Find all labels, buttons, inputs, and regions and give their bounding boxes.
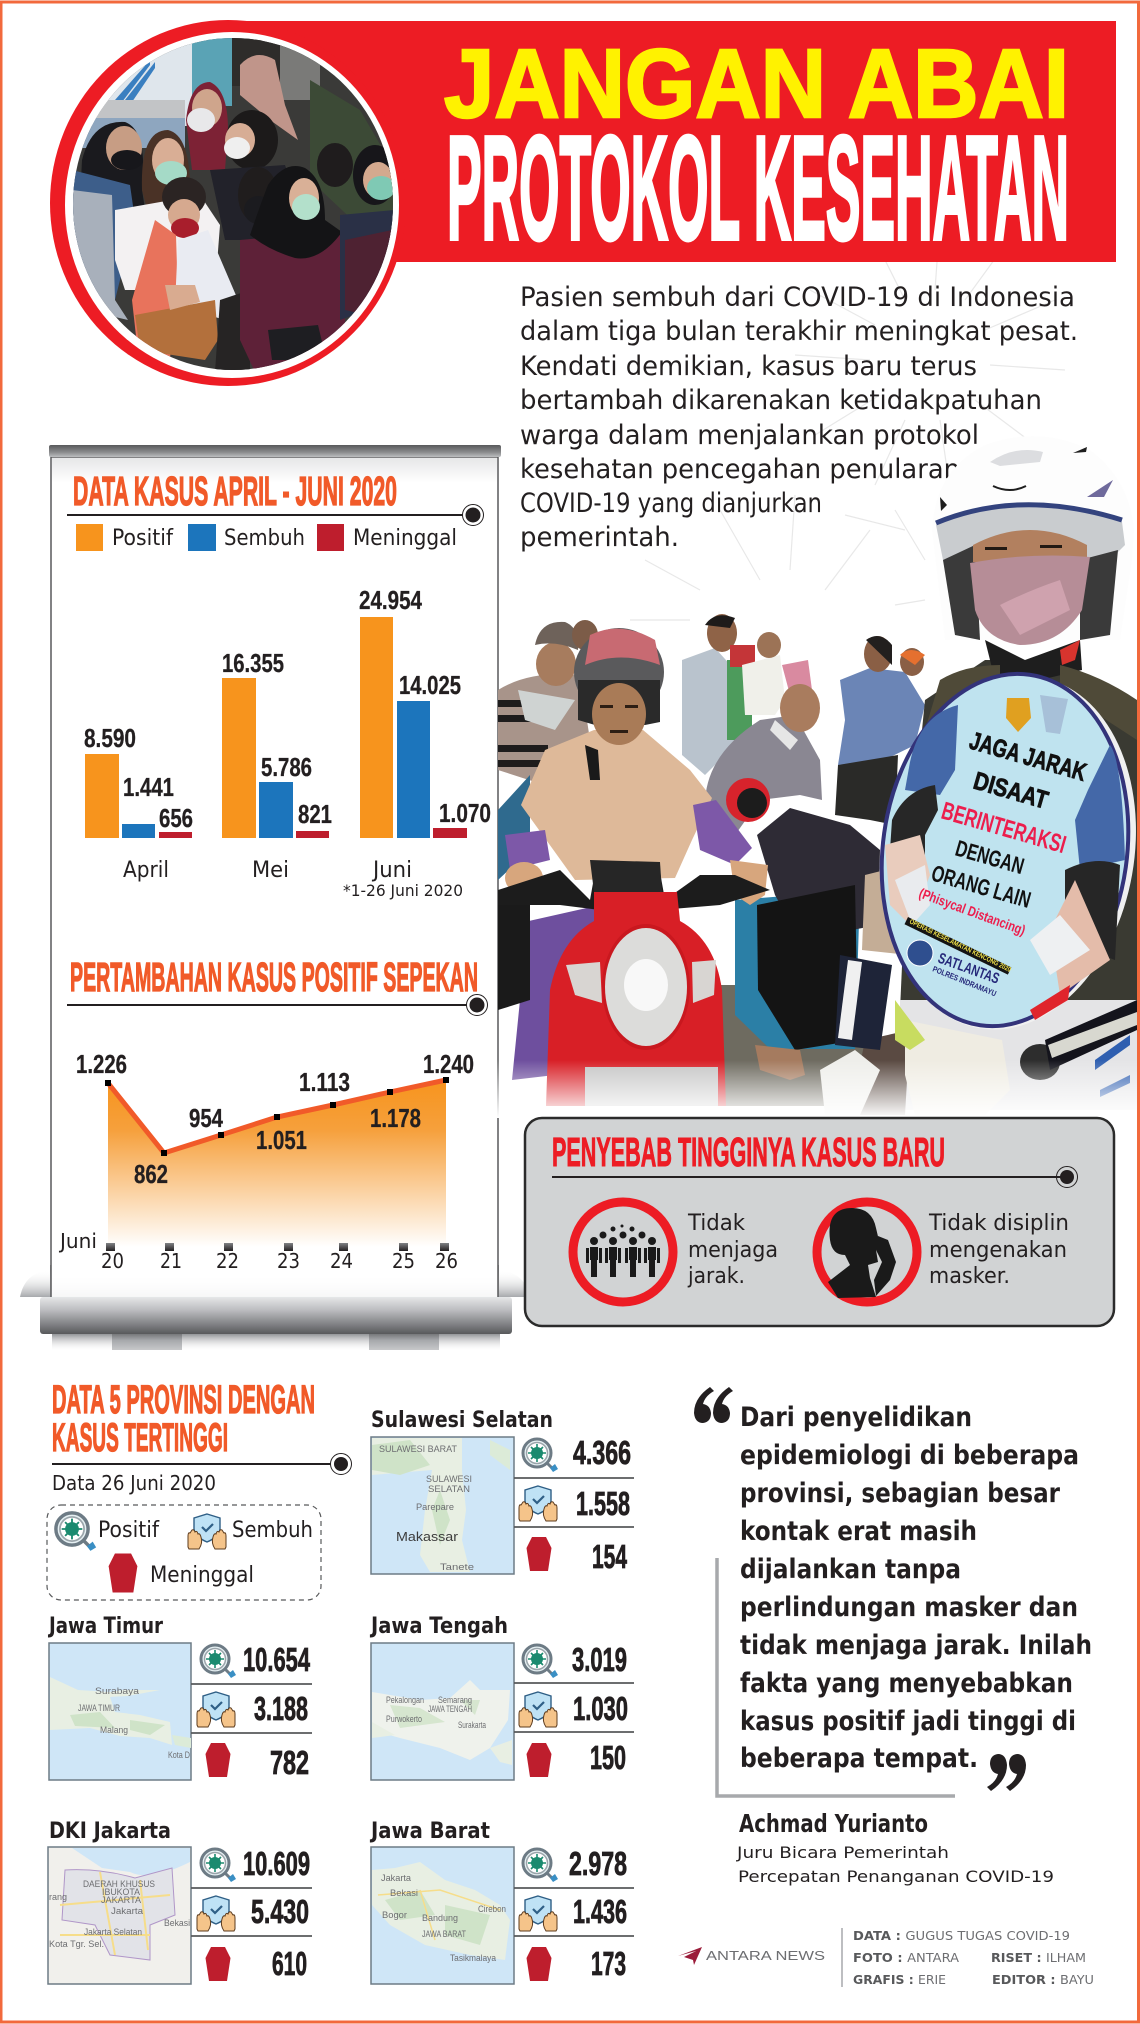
province: Jawa Barat: 173 <box>591 1945 626 1982</box>
quote text: perlindungan masker dan <box>740 1592 1078 1623</box>
bar chart: Mei <box>252 858 289 883</box>
closing quote mark <box>987 1754 1026 1791</box>
title banner <box>228 21 1116 271</box>
sign text: JAGA JARAK <box>966 727 1089 787</box>
area line chart: 1.051 <box>256 1125 307 1155</box>
cause text two <box>928 1211 1069 1289</box>
officer helmet <box>947 436 1035 490</box>
intro paragraph <box>520 282 1078 553</box>
map: Jakarta Selatan <box>84 1927 142 1937</box>
quote text: provinsi, sebagian besar <box>740 1478 1061 1509</box>
hanger tab right <box>369 1334 439 1350</box>
heading: data kasus <box>67 468 484 526</box>
area line chart: 23 <box>277 1249 300 1273</box>
province: Jawa Tengah <box>369 1614 634 1780</box>
speaker name: Achmad Yurianto <box>739 1809 928 1838</box>
heading: data kasus: DATA KASUS APRIL - JUNI 2020 <box>73 468 397 514</box>
map: Kota D <box>168 1750 190 1760</box>
province: Jawa Timur <box>47 1614 312 1781</box>
icon: crowd not distancing <box>573 1202 673 1302</box>
banner background <box>228 21 1116 262</box>
map: Makassar <box>396 1529 459 1544</box>
area line chart: 862 <box>134 1159 168 1189</box>
bar chart: 16.355 <box>222 648 284 678</box>
map: Bekasi <box>390 1888 418 1898</box>
map: Tanete <box>440 1562 474 1572</box>
map: Malang <box>100 1725 128 1735</box>
map: IBUKOTA <box>102 1887 140 1897</box>
province: Jawa Timur: 10.654 <box>243 1641 310 1678</box>
officer mask <box>970 555 1090 645</box>
intro paragraph: pemerintah. <box>520 522 679 553</box>
headline line one: JANGAN ABAI <box>444 29 1069 138</box>
intro paragraph: warga dalam menjalankan protokol <box>520 420 979 451</box>
officer sleeve <box>835 955 892 1050</box>
province: Jawa Tengah: 3.019 <box>572 1641 627 1678</box>
map: DAERAH KHUSUS <box>83 1879 155 1889</box>
map: Bekasi <box>164 1918 190 1928</box>
hi-vis vest <box>895 1000 925 1050</box>
bar chart legend <box>76 524 457 551</box>
province: Jawa Timur: 3.188 <box>254 1690 308 1727</box>
province: Jawa Barat: 1.436 <box>573 1893 627 1930</box>
sign text: DISAAT <box>970 767 1051 815</box>
map: JAWA TIMUR <box>78 1703 120 1713</box>
board rim <box>857 656 1140 1050</box>
province: Sulawesi Selatan: 1.558 <box>576 1485 630 1522</box>
scroll panel: case data <box>20 445 530 1350</box>
province: DKI Jakarta: 10.609 <box>243 1845 310 1882</box>
police badges <box>1006 698 1031 732</box>
legend: province icons: Sembuh <box>232 1518 313 1543</box>
map: Surabaya <box>95 1686 139 1696</box>
panel: causes of new cases <box>525 1118 1114 1326</box>
area line chart <box>58 1049 474 1273</box>
area line chart: 1.240 <box>423 1049 474 1079</box>
officer body <box>900 660 1137 1010</box>
bar chart: 1.441 <box>123 772 174 802</box>
map: JAKARTA <box>101 1895 141 1905</box>
map: Bandung <box>422 1913 458 1923</box>
logo: Antara News: ANTARA NEWS <box>706 1948 825 1963</box>
area line chart: 22 <box>216 1249 239 1273</box>
text: PERTAMBAHAN KASUS POSITIF SEPEKAN <box>70 954 478 1000</box>
sign board held by officer <box>857 656 1140 1050</box>
bar chart: 14.025 <box>399 670 461 700</box>
bar chart: 1.070 <box>439 798 491 828</box>
intro paragraph: Kendati demikian, kasus baru terus <box>520 351 977 382</box>
province: Jawa Tengah: Jawa Tengah <box>369 1614 508 1639</box>
map: Jakarta <box>381 1873 411 1883</box>
province: DKI Jakarta: 610 <box>272 1945 307 1982</box>
intro paragraph: Pasien sembuh dari COVID-19 di Indonesia <box>520 282 1075 313</box>
hunched dark man <box>757 808 880 940</box>
map: Tasikmalaya <box>450 1953 496 1963</box>
map <box>49 1643 191 1780</box>
quote block: Percepatan Penanganan COVID-19 <box>738 1867 1054 1886</box>
blue silhouettes <box>905 705 958 795</box>
province: Jawa Timur: 782 <box>270 1744 309 1781</box>
bar chart legend: Positif <box>112 526 174 551</box>
handlebars <box>498 870 770 910</box>
legend: province icons <box>47 1505 321 1600</box>
sign text: BERINTERAKSI <box>938 797 1069 859</box>
standing white shirt man <box>682 648 740 775</box>
center woman <box>142 130 190 204</box>
map <box>371 1643 514 1780</box>
bottom roller <box>40 1297 512 1334</box>
province: Jawa Tengah: 150 <box>590 1739 626 1776</box>
credits: DATA : GUGUS TUGAS COVID-19 <box>853 1929 1070 1943</box>
bar chart legend: Meninggal <box>353 526 457 551</box>
maroon hijab woman <box>186 82 228 170</box>
area line chart: 1.178 <box>370 1103 421 1133</box>
quote block <box>694 1387 1092 1886</box>
map: Surakarta <box>458 1720 486 1730</box>
sign text: OPERASI KESELAMATAN KENCONG 2020 <box>908 919 1012 974</box>
top rail <box>49 445 501 457</box>
circular crowd photo <box>50 20 406 386</box>
quote bracket <box>717 1558 955 1796</box>
area line chart: 1.113 <box>299 1067 350 1097</box>
sign text: (Phisycal Distancing) <box>917 885 1028 938</box>
right woman <box>353 145 397 205</box>
map: JAWA TENGAH <box>428 1704 472 1714</box>
map <box>48 1847 191 1984</box>
shadow above roller <box>20 1270 530 1297</box>
decorative virus outlines <box>630 220 1065 620</box>
area line chart: 25 <box>392 1249 415 1273</box>
map: rang <box>49 1892 67 1902</box>
white mask woman <box>226 110 278 170</box>
heading: five provinces: KASUS TERTINGGI <box>52 1416 228 1460</box>
map: JAWA BARAT <box>422 1929 466 1939</box>
background people <box>498 674 590 790</box>
intro paragraph: COVID-19 yang dianjurkan <box>520 488 822 519</box>
opening quote mark <box>694 1387 733 1423</box>
heading: five provinces: Data 26 Juni 2020 <box>52 1471 216 1495</box>
speaker role: Juru Bicara Pemerintah <box>736 1843 949 1862</box>
map <box>371 1847 514 1984</box>
map: Bogor <box>382 1910 407 1920</box>
gray shirt man <box>705 715 822 835</box>
quote text: tidak menjaga jarak. Inilah <box>740 1630 1092 1661</box>
quote text: kasus positif jadi tinggi di <box>740 1706 1076 1737</box>
quote text: dijalankan tanpa <box>740 1554 961 1585</box>
right masked face <box>1065 861 1120 960</box>
shadow below roller <box>52 1334 500 1350</box>
credits <box>853 1929 1094 1987</box>
bar chart: *1-26 Juni 2020 <box>343 881 463 900</box>
bar chart: Juni <box>371 858 412 883</box>
area line chart: 21 <box>160 1249 182 1273</box>
map: Kota Tgr. Sel. <box>49 1939 104 1949</box>
province: DKI Jakarta: 5.430 <box>251 1893 309 1930</box>
quote text: kontak erat masih <box>740 1516 977 1547</box>
area line chart: 24 <box>330 1249 353 1273</box>
sign text <box>904 727 1089 998</box>
map <box>371 1437 514 1574</box>
bar chart: 5.786 <box>261 752 312 782</box>
black hijab woman with maroon sweater <box>240 230 345 372</box>
area line chart: 1.226 <box>76 1049 127 1079</box>
credits: FOTO : ANTARA <box>853 1951 960 1965</box>
motorcyclist woman <box>512 908 594 1080</box>
sign text: DENGAN <box>953 835 1027 879</box>
bar chart: 656 <box>159 803 193 833</box>
map: Semarang <box>438 1695 472 1705</box>
cause text one: jarak. <box>687 1264 745 1289</box>
intro paragraph: kesehatan pencegahan penularan <box>520 454 960 485</box>
province: Jawa Barat: 2.978 <box>569 1845 627 1882</box>
map: Pekalongan <box>386 1695 424 1705</box>
cause text one: Tidak <box>687 1211 745 1236</box>
bar chart: 821 <box>298 799 332 829</box>
bar chart legend: Sembuh <box>224 526 305 551</box>
quote text: fakta yang menyebabkan <box>740 1668 1073 1699</box>
intro paragraph: bertambah dikarenakan ketidakpatuhan <box>520 385 1042 416</box>
shoulder <box>928 665 1000 722</box>
bar chart: April <box>123 858 169 883</box>
province: Sulawesi Selatan: Sulawesi Selatan <box>371 1408 553 1433</box>
sign text: SATLANTAS <box>936 950 1002 988</box>
hanger tab left <box>112 1334 182 1350</box>
intro paragraph: dalam tiga bulan terakhir meningkat pesat. <box>520 316 1078 347</box>
map: SELATAN <box>428 1484 470 1494</box>
area line chart: 20 <box>101 1249 124 1273</box>
bar chart: 8.590 <box>84 723 136 753</box>
map: Jakarta <box>111 1906 143 1916</box>
province: Sulawesi Selatan <box>371 1408 634 1575</box>
bar chart <box>84 585 491 900</box>
logo: Antara News <box>678 1947 825 1965</box>
province: Sulawesi Selatan: 154 <box>592 1538 627 1575</box>
area line chart: 26 <box>435 1249 458 1273</box>
cause text two: Tidak disiplin <box>928 1211 1069 1236</box>
left masked face <box>890 785 938 870</box>
cause text one <box>687 1211 778 1289</box>
red scooter <box>546 892 726 1106</box>
province: Jawa Timur: Jawa Timur <box>47 1614 163 1639</box>
sign text: ORANG LAIN <box>929 860 1034 913</box>
red mask woman <box>162 177 206 212</box>
blue cart and road <box>718 985 870 1106</box>
cause text two: mengenakan <box>929 1238 1067 1263</box>
photo: motorcyclist and officer crowd <box>498 436 1137 1115</box>
left woman <box>82 122 144 207</box>
credits: RISET : ILHAM <box>991 1951 1086 1965</box>
map: Cirebon <box>478 1904 506 1914</box>
icon: touching nose without mask <box>817 1202 917 1302</box>
beige hijab woman <box>240 55 298 140</box>
cause text one: menjaga <box>688 1238 778 1263</box>
quote text: epidemiologi di beberapa <box>740 1440 1079 1471</box>
province: Sulawesi Selatan: 4.366 <box>573 1434 631 1471</box>
cause text two: masker. <box>929 1264 1010 1289</box>
heading: five provinces: DATA 5 PROVINSI DENGAN <box>52 1378 315 1422</box>
panel sheet <box>51 457 498 1297</box>
bar chart: 24.954 <box>359 585 422 615</box>
sign text: POLRES INDRAMAYU <box>931 965 998 998</box>
map: SULAWESI BARAT <box>379 1444 457 1454</box>
credits: EDITOR : BAYU <box>992 1973 1094 1987</box>
heading: pertambahan kasus <box>67 954 488 1016</box>
map: SULAWESI <box>426 1474 472 1484</box>
map: Parepare <box>416 1502 454 1512</box>
credits: GRAFIS : ERIE <box>853 1973 946 1987</box>
province: Jawa Tengah: 1.030 <box>573 1690 628 1727</box>
legend: province icons: Positif <box>98 1518 160 1543</box>
blue shirt man <box>838 668 925 765</box>
heading: five provinces <box>52 1378 352 1495</box>
mirror <box>726 778 770 822</box>
map: Purwokerto <box>386 1714 422 1724</box>
bottom photo fade <box>497 1060 1137 1118</box>
province: DKI Jakarta <box>48 1819 312 1984</box>
area line chart: Juni <box>58 1229 97 1253</box>
dark-hair woman <box>238 167 274 216</box>
province: DKI Jakarta: DKI Jakarta <box>49 1819 171 1844</box>
quote text: beberapa tempat. <box>740 1743 978 1774</box>
quote text <box>740 1402 1092 1774</box>
quote text: Dari penyelidikan <box>740 1402 972 1433</box>
province: Jawa Barat <box>369 1819 634 1984</box>
area line chart: 954 <box>189 1103 223 1133</box>
legend: province icons: Meninggal <box>150 1563 254 1588</box>
province: Jawa Barat: Jawa Barat <box>369 1819 490 1844</box>
